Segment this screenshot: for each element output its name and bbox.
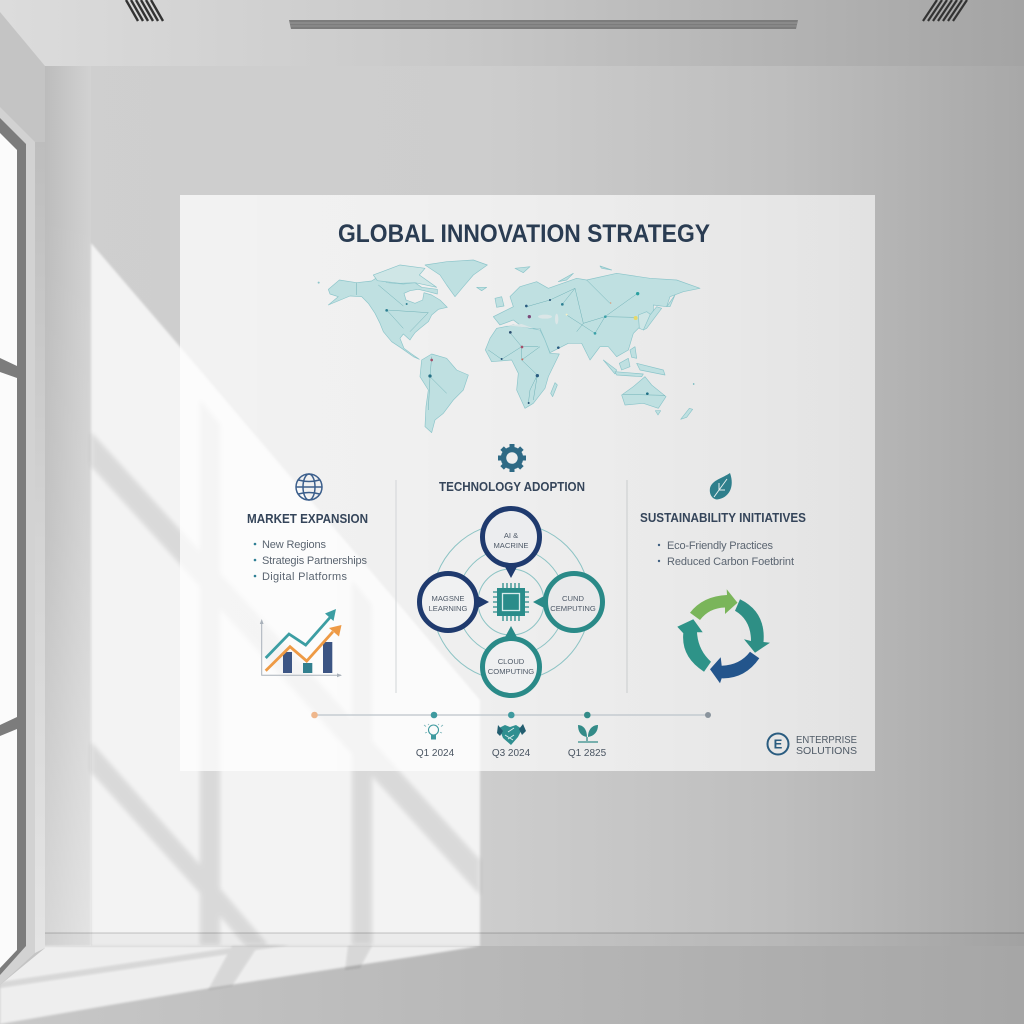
column: market expansion <box>247 474 368 677</box>
window glass panes <box>0 133 17 968</box>
infographic poster panel <box>180 195 875 771</box>
heading: SUSTAINABILITY INITIATIVES <box>640 510 806 525</box>
ceiling vent: centre <box>289 20 798 29</box>
node: machine learning <box>420 574 489 630</box>
icon: handshake <box>497 724 526 745</box>
bullet list: Digital Platforms <box>262 571 348 583</box>
growth chart <box>260 609 342 677</box>
timeline <box>311 712 711 759</box>
baseboard <box>45 932 1024 946</box>
world map <box>318 260 700 433</box>
icon: light bulb <box>424 724 443 740</box>
ceiling vent: left <box>126 0 163 21</box>
icon: leaf <box>710 473 732 500</box>
inland seas <box>503 314 558 328</box>
continents <box>328 260 700 433</box>
icon: sprout <box>578 725 598 742</box>
node: cloud computing bottom: COMPUTING <box>488 667 534 676</box>
node: cloud computing bottom <box>482 626 540 696</box>
node: AI and machine: MACRINE <box>493 541 529 550</box>
network nodes <box>318 282 694 404</box>
side wall <box>0 12 45 985</box>
label: Q3 2024 <box>492 748 531 759</box>
orbit rings <box>432 523 590 681</box>
logo: enterprise solutions: SOLUTIONS <box>796 746 857 757</box>
window light shadows <box>91 400 480 945</box>
node: cloud computing right <box>533 574 602 630</box>
node: cloud computing right: CEMPUTING <box>550 604 596 613</box>
ceiling vent: right <box>923 0 967 21</box>
column: sustainability initiatives <box>640 473 806 683</box>
bullet list <box>658 540 794 568</box>
heading: TECHNOLOGY ADOPTION <box>439 479 585 494</box>
floor shadows <box>0 945 372 990</box>
node: machine learning: LEARNING <box>429 604 468 613</box>
bullet list: Eco-Friendly Practices <box>667 540 774 552</box>
logo: enterprise solutions: ENTERPRISE <box>796 735 857 746</box>
sunlit floor <box>0 946 480 1024</box>
icon: globe <box>296 474 322 500</box>
timeline axis <box>315 714 708 716</box>
window trim <box>0 107 35 985</box>
network connection lines <box>357 280 665 410</box>
heading: MARKET EXPANSION <box>247 511 368 526</box>
column divider left <box>395 480 397 693</box>
label: Q1 2825 <box>568 748 607 759</box>
column: technology adoption <box>420 444 602 696</box>
icon: recycling arrows <box>677 589 770 683</box>
icon: microchip <box>493 583 529 621</box>
side wall light strip <box>35 142 45 953</box>
sunlight patch on wall <box>91 243 480 946</box>
node: machine learning: MAGSNE <box>432 594 464 603</box>
logo: enterprise solutions <box>768 734 857 757</box>
node: AI and machine: AI & <box>504 531 518 540</box>
node: AI and machine <box>482 508 540 578</box>
label: Q1 2024 <box>416 748 455 759</box>
bullet list <box>254 539 368 583</box>
bullet list: New Regions <box>262 539 326 551</box>
lit column gradient <box>45 200 91 946</box>
node: cloud computing right: CUND <box>562 594 584 603</box>
shaded wall column <box>45 66 91 946</box>
node: cloud computing bottom: CLOUD <box>498 657 525 666</box>
column divider right <box>626 480 628 693</box>
window frame <box>0 118 26 975</box>
logo: enterprise solutions: E <box>774 736 783 752</box>
icon: gear <box>498 444 526 472</box>
floor <box>0 946 1024 1024</box>
ceiling <box>0 0 1024 67</box>
bullet list: Reduced Carbon Foetbrint <box>667 556 794 568</box>
timeline nodes <box>311 712 711 718</box>
title: GLOBAL INNOVATION STRATEGY <box>338 220 710 248</box>
bullet list: Strategis Partnerships <box>262 555 368 567</box>
